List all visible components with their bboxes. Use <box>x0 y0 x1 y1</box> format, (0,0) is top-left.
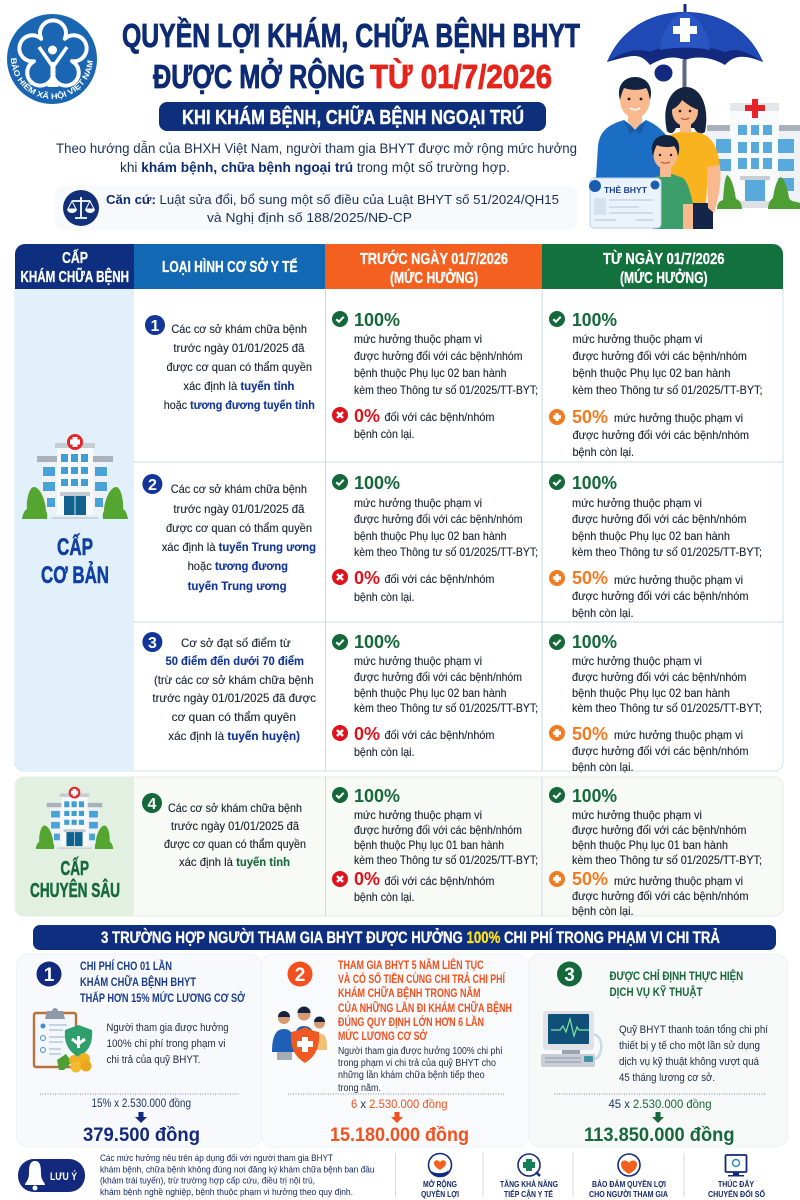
benefit: mở rộng quyền lợi: MỞ RỘNG <box>423 1178 457 1189</box>
row 4: facility type: 4 <box>148 796 157 813</box>
benefit: thúc đẩy chuyển đổi số: THÚC ĐẨY <box>718 1178 754 1189</box>
level: cấp chuyên sâu: CHUYÊN SÂU <box>30 878 120 902</box>
row 1: facility type: hoặc tương đương tuyến tỉnh <box>164 399 315 412</box>
table header: CẤP <box>62 248 88 267</box>
row 1: from 01/7/2026: mức hưởng thuộc phạm vi <box>572 333 702 346</box>
card 2 text <box>338 1045 503 1094</box>
row 3: before 01/7/2026: bệnh còn lại. <box>354 746 414 759</box>
row 3: facility type: trước ngày 01/01/2025 đã được <box>152 692 316 705</box>
table header: (MỨC HƯỞNG) <box>620 268 708 287</box>
row 1: from 01/7/2026: bệnh thuộc Phụ lục 02 ban hành <box>572 367 730 380</box>
title <box>122 17 580 95</box>
row 2: from 01/7/2026: mức hưởng thuộc phạm vi <box>572 497 702 510</box>
woman <box>665 87 721 229</box>
card 3 result: 113.850.000 đồng <box>584 1125 734 1146</box>
card 3 <box>528 954 788 1147</box>
row 2: facility type: tuyến Trung ương <box>188 580 287 593</box>
row 1: facility type: trước ngày 01/01/2025 đã <box>173 342 305 355</box>
logo: Bảo hiểm xã hội Việt Nam: BẢO HIỂM XÃ HỘI VIỆT NAM <box>10 58 93 100</box>
row 4: before 01/7/2026: 100% <box>354 786 400 806</box>
benefit: bảo đảm quyền lợi cho người tham gia: CHO NGƯỜI THAM GIA <box>589 1188 668 1199</box>
row 4: before 01/7/2026: 0% <box>354 869 380 889</box>
row 3: facility type: xác định là tuyến huyện) <box>168 730 300 743</box>
badge 3 <box>557 962 582 986</box>
card 2 heading: KHÁM CHỮA BỆNH TRONG NĂM <box>338 987 480 1000</box>
row 2: from 01/7/2026: được hưởng đối với các bệnh/nhóm <box>572 513 746 526</box>
note badge: lưu ý <box>18 1159 85 1192</box>
row 2: from 01/7/2026 <box>549 473 762 620</box>
card 2 heading: VÀ CÓ SỐ TIỀN CÙNG CHI TRẢ CHI PHÍ <box>338 972 506 986</box>
badge 2: 2 <box>295 965 305 986</box>
card 2 text: trong năm. <box>338 1083 381 1094</box>
row 3: from 01/7/2026: kèm theo Thông tư số 01/2025/TT-BYT; <box>572 702 762 715</box>
health insurance card <box>589 178 661 228</box>
health insurance card: THẺ BHYT <box>604 184 648 195</box>
row 1: from 01/7/2026: 50% <box>572 407 608 427</box>
card 1 text: chi trả của quỹ BHYT. <box>106 1054 200 1066</box>
benefit: thúc đẩy chuyển đổi số: CHUYỂN ĐỔI SỐ <box>708 1188 765 1199</box>
intro text: khi khám bệnh, chữa bệnh ngoại trú trong một số trường hợp. <box>120 160 510 175</box>
title: ĐƯỢC MỞ RỘNG <box>153 57 365 95</box>
row 4: from 01/7/2026 <box>549 786 762 918</box>
card 1 heading: CHI PHÍ CHO 01 LẦN <box>80 960 172 973</box>
row 2: facility type: xác định là tuyến Trung ương <box>162 541 316 554</box>
card 2 heading: CỦA NHỮNG LẦN ĐI KHÁM CHỮA BỆNH <box>338 1002 512 1015</box>
card 1 text: 100% chi phí trong phạm vi <box>106 1038 226 1050</box>
card 3 heading <box>610 970 743 999</box>
row 2: from 01/7/2026: bệnh còn lại. <box>572 607 634 620</box>
row 2: before 01/7/2026: bệnh thuộc Phụ lục 02 ban hành <box>354 530 506 543</box>
row 4: before 01/7/2026: kèm theo Thông tư số 01/2025/TT-BYT; <box>354 854 538 867</box>
logo: Bảo hiểm xã hội Việt Nam <box>7 14 97 104</box>
badge 2 <box>288 962 312 986</box>
row 4: before 01/7/2026: bệnh thuộc Phụ lục 01 ban hành <box>354 839 504 852</box>
table header <box>15 244 783 289</box>
table header: LOẠI HÌNH CƠ SỞ Y TẾ <box>162 257 298 276</box>
row 1: before 01/7/2026: 0% <box>354 406 380 426</box>
row 2: facility type: trước ngày 01/01/2025 đã <box>173 503 305 516</box>
banner: 3 cases: 3 TRƯỜNG HỢP NGƯỜI THAM GIA BHYT ĐƯỢC HƯỞNG 100% CHI PHÍ TRONG PHẠM VI CHI TRẢ <box>101 928 720 947</box>
row 3: facility type: Cơ sở đạt số điểm từ <box>181 637 291 650</box>
row 1: before 01/7/2026: đối với các bệnh/nhóm <box>384 411 494 424</box>
level: cấp chuyên sâu <box>30 787 120 902</box>
legal basis callout <box>55 185 577 231</box>
row 2: from 01/7/2026: mức hưởng thuộc phạm vi <box>614 574 743 587</box>
card 2 formula: 6 x 2.530.000 đồng <box>351 1097 448 1111</box>
row 3: from 01/7/2026: bệnh thuộc Phụ lục 02 ban hành <box>572 687 730 700</box>
row 2: facility type: 2 <box>148 477 157 494</box>
note text: khám bệnh, chữa bệnh không đúng nơi đăng ký khám chữa bệnh ban đầu <box>100 1164 374 1174</box>
row 4: from 01/7/2026: được hưởng đối với các bệnh/nhóm <box>572 890 748 903</box>
card 2 text: trong phạm vi chi trả của quỹ BHYT cho <box>338 1057 496 1069</box>
row 3: before 01/7/2026: bệnh thuộc Phụ lục 02 ban hành <box>354 687 506 700</box>
row 2: before 01/7/2026: mức hưởng thuộc phạm vi <box>354 497 482 510</box>
row 3: from 01/7/2026: 50% <box>572 724 608 744</box>
card 3 text <box>619 1024 768 1084</box>
arrow 2 <box>391 1112 403 1123</box>
title: QUYỀN LỢI KHÁM, CHỮA BỆNH BHYT <box>122 17 580 54</box>
row 4: facility type <box>142 793 306 869</box>
man <box>596 77 666 178</box>
legal basis text: và Nghị định số 188/2025/NĐ-CP <box>207 210 412 225</box>
row 3: facility type: (trừ các cơ sở khám chữa bệnh <box>154 674 314 687</box>
row 4: from 01/7/2026: mức hưởng thuộc phạm vi <box>572 809 702 822</box>
card 2 heading: ĐÚNG QUY ĐỊNH LỚN HƠN 6 LẦN <box>338 1016 484 1029</box>
row 1: before 01/7/2026: bệnh thuộc Phụ lục 02 ban hành <box>354 367 506 380</box>
badge 1: 1 <box>44 965 55 986</box>
card 2 heading: MỨC LƯƠNG CƠ SỞ <box>338 1030 427 1043</box>
row 4: before 01/7/2026: bệnh còn lại. <box>354 891 414 904</box>
badge 3: 3 <box>564 965 575 986</box>
row 1: facility type: được cơ quan có thẩm quyền <box>166 361 312 374</box>
note badge: lưu ý: LƯU Ý <box>50 1170 78 1183</box>
row 3: from 01/7/2026: 100% <box>572 632 617 652</box>
row 4: facility type: trước ngày 01/01/2025 đã <box>171 820 300 833</box>
card 1 result: 379.500 đồng <box>83 1125 200 1146</box>
benefit: tăng khả năng tiếp cận y tế: TIẾP CẬN Y TẾ <box>504 1188 553 1199</box>
card 1 heading: KHÁM CHỮA BỆNH BHYT <box>80 976 196 989</box>
row 1: facility type: xác định là tuyến tỉnh <box>183 380 294 393</box>
card 1 heading <box>80 960 245 1005</box>
row 2: before 01/7/2026 <box>332 473 538 604</box>
legal basis text <box>106 192 559 225</box>
subtitle pill <box>159 102 546 131</box>
level: cấp cơ bản: CẤP <box>57 533 93 561</box>
table header: KHÁM CHỮA BỆNH <box>20 266 129 286</box>
card 3 heading: ĐƯỢC CHỈ ĐỊNH THỰC HIỆN <box>610 970 743 983</box>
benefit: mở rộng quyền lợi: QUYỀN LỢI <box>421 1189 459 1199</box>
table header: TRƯỚC NGÀY 01/7/2026 <box>360 249 508 268</box>
row 2: before 01/7/2026: bệnh còn lại. <box>354 591 414 604</box>
row 1: facility type <box>145 315 315 412</box>
note text: khám bệnh nghề nghiệp, bệnh thuộc phạm vi hưởng theo quy định. <box>100 1186 353 1197</box>
row 3: facility type: cơ quan có thẩm quyên <box>172 711 296 724</box>
row 1: before 01/7/2026 <box>332 310 538 441</box>
card 3 text: 45 tháng lương cơ sở. <box>619 1072 715 1084</box>
icon: clipboard with shield <box>34 1008 92 1072</box>
icon: scales <box>63 190 99 226</box>
legal basis text: Căn cứ: Luật sửa đổi, bổ sung một số điều của Luật BHYT số 51/2024/QH15 <box>106 192 559 207</box>
row 3: from 01/7/2026: được hưởng đối với các bệnh/nhóm <box>572 671 746 684</box>
row 3: before 01/7/2026: 0% <box>354 724 380 744</box>
benefit: thúc đẩy chuyển đổi số <box>708 1155 765 1199</box>
intro text <box>56 141 577 175</box>
boy <box>652 135 693 229</box>
icon: family with shield <box>272 1007 327 1063</box>
note text: Các mức hưởng nêu trên áp dụng đối với người tham gia BHYT <box>100 1152 333 1163</box>
row 1: from 01/7/2026: mức hưởng thuộc phạm vi <box>614 412 743 425</box>
card 2 text: Người tham gia được hưởng 100% chi phí <box>338 1045 503 1057</box>
row 4: from 01/7/2026: 100% <box>572 786 617 806</box>
row 1: facility type: Các cơ sở khám chữa bệnh <box>171 323 307 336</box>
level: cấp cơ bản <box>22 434 128 589</box>
row 4: before 01/7/2026: được hưởng đối với các bệnh/nhóm <box>354 824 522 837</box>
arrow 3 <box>652 1112 664 1123</box>
row 4: from 01/7/2026: kèm theo Thông tư số 01/2025/TT-BYT; <box>572 854 762 867</box>
row 1: before 01/7/2026: 100% <box>354 310 400 330</box>
card 3 text: dịch vụ kỹ thuật không vượt quá <box>619 1056 760 1068</box>
title: TỪ 01/7/2026 <box>370 58 552 95</box>
note text: (khám trái tuyến), trừ trường hợp cấp cứu, điều trị nội trú, <box>100 1174 315 1186</box>
card 2 heading: THAM GIA BHYT 5 NĂM LIÊN TỤC <box>338 959 484 972</box>
row 2: before 01/7/2026: đối với các bệnh/nhóm <box>384 573 494 586</box>
row 1: from 01/7/2026: bệnh còn lại. <box>572 446 634 459</box>
row 2: before 01/7/2026: kèm theo Thông tư số 01/2025/TT-BYT; <box>354 546 538 559</box>
row 2: facility type: được cơ quan có thẩm quyền <box>166 522 312 535</box>
level: cấp cơ bản: CƠ BẢN <box>41 560 109 589</box>
row 3: before 01/7/2026 <box>332 632 538 759</box>
row 1: from 01/7/2026: được hưởng đối với các bệnh/nhóm <box>572 350 747 363</box>
row 4: facility type: Các cơ sở khám chữa bệnh <box>168 802 302 815</box>
row 2: from 01/7/2026: được hưởng đối với các bệnh/nhóm <box>572 590 748 603</box>
row 1: from 01/7/2026: được hưởng đối với các bệnh/nhóm <box>572 429 749 442</box>
hospital <box>707 99 800 209</box>
row 4: from 01/7/2026: bệnh còn lại. <box>572 905 634 918</box>
row 2: from 01/7/2026: 50% <box>572 568 608 588</box>
intro text: Theo hướng dẫn của BHXH Việt Nam, người tham gia BHYT được mở rộng mức hưởng <box>56 141 577 156</box>
card 1 text <box>106 1022 228 1066</box>
card 3 text: thiết bị y tế cho một lần sử dụng <box>619 1040 760 1052</box>
row 4: from 01/7/2026: bệnh thuộc Phụ lục 01 ban hành <box>572 839 728 852</box>
level: cấp chuyên sâu: CẤP <box>60 857 89 880</box>
umbrella <box>607 4 763 88</box>
row 2: facility type: hoặc tương đương <box>188 560 288 573</box>
row 4: before 01/7/2026 <box>332 786 538 904</box>
row 4: from 01/7/2026: 50% <box>572 869 608 889</box>
row 3: before 01/7/2026: mức hưởng thuộc phạm vi <box>354 655 482 668</box>
row 4: facility type: xác định là tuyến tỉnh <box>179 856 290 869</box>
card 2 result: 15.180.000 đồng <box>330 1125 469 1146</box>
illustration: family under umbrella with hospital <box>589 4 800 229</box>
row 2: facility type: Các cơ sở khám chữa bệnh <box>171 483 307 496</box>
row 3: from 01/7/2026 <box>549 632 762 774</box>
row 3: from 01/7/2026: mức hưởng thuộc phạm vi <box>614 729 743 742</box>
row 4: from 01/7/2026: được hưởng đối với các bệnh/nhóm <box>572 824 746 837</box>
row 1: from 01/7/2026 <box>549 310 762 459</box>
card 1 heading: THẤP HƠN 15% MỨC LƯƠNG CƠ SỞ <box>80 992 245 1005</box>
benefit: bảo đảm quyền lợi cho người tham gia <box>589 1154 668 1199</box>
row 2: before 01/7/2026: 0% <box>354 568 380 588</box>
row 1: facility type: 1 <box>151 318 160 335</box>
banner: 3 cases <box>33 925 776 950</box>
row 2: from 01/7/2026: 100% <box>572 473 617 493</box>
benefit: mở rộng quyền lợi <box>421 1154 459 1199</box>
benefit: tăng khả năng tiếp cận y tế <box>500 1154 558 1199</box>
table header: TỪ NGÀY 01/7/2026 <box>603 249 725 268</box>
row 3: from 01/7/2026: bệnh còn lại. <box>572 761 634 774</box>
row 3: before 01/7/2026: 100% <box>354 632 400 652</box>
row 2: before 01/7/2026: được hưởng đối với các bệnh/nhóm <box>354 513 522 526</box>
arrow 1 <box>135 1112 147 1123</box>
card 2 heading <box>338 959 512 1043</box>
row 1: from 01/7/2026: 100% <box>572 310 617 330</box>
row 1: from 01/7/2026: kèm theo Thông tư số 01/2025/TT-BYT; <box>572 384 762 397</box>
row 2: from 01/7/2026: bệnh thuộc Phụ lục 02 ban hành <box>572 530 730 543</box>
row 4: before 01/7/2026: đối với các bệnh/nhóm <box>384 875 494 888</box>
table panel: cấp cơ bản background <box>15 280 783 771</box>
row 2: facility type <box>142 474 316 593</box>
card 1 formula: 15% x 2.530.000 đồng <box>92 1096 191 1110</box>
card 1 <box>16 954 262 1147</box>
card 2 <box>262 954 528 1147</box>
row 3: before 01/7/2026: kèm theo Thông tư số 01/2025/TT-BYT; <box>354 702 538 715</box>
row 2: before 01/7/2026: 100% <box>354 473 400 493</box>
row 4: facility type: được cơ quan có thẩm quyền <box>164 838 306 851</box>
row 3: facility type: 3 <box>148 635 157 652</box>
row 4: before 01/7/2026: mức hưởng thuộc phạm vi <box>354 809 482 822</box>
row 1: before 01/7/2026: mức hưởng thuộc phạm vi <box>354 333 482 346</box>
row 1: before 01/7/2026: được hưởng đối với các bệnh/nhóm <box>354 350 522 363</box>
card 3 text: Quỹ BHYT thanh toán tổng chi phí <box>619 1024 768 1036</box>
card 2 text: những lần khám chữa bệnh tiếp theo <box>338 1069 485 1081</box>
subtitle pill: KHI KHÁM BỆNH, CHỮA BỆNH NGOẠI TRÚ <box>182 105 524 129</box>
badge 1 <box>36 962 62 986</box>
note text <box>100 1152 374 1197</box>
row 3: facility type: 50 điểm đến dưới 70 điểm <box>166 655 304 668</box>
table panel: cấp chuyên sâu background <box>15 777 783 916</box>
row 3: before 01/7/2026: được hưởng đối với các bệnh/nhóm <box>354 671 522 684</box>
row 1: before 01/7/2026: bệnh còn lại. <box>354 428 414 441</box>
row 3: from 01/7/2026: được hưởng đối với các bệnh/nhóm <box>572 745 748 758</box>
row 1: before 01/7/2026: kèm theo Thông tư số 01/2025/TT-BYT; <box>354 384 538 397</box>
card 1 text: Người tham gia được hưởng <box>106 1022 228 1034</box>
card 3 formula: 45 x 2.530.000 đồng <box>608 1097 712 1111</box>
row 3: facility type <box>142 632 316 743</box>
table header: (MỨC HƯỞNG) <box>390 268 478 287</box>
card 3 heading: DỊCH VỤ KỸ THUẬT <box>610 986 702 999</box>
row 2: from 01/7/2026: kèm theo Thông tư số 01/2025/TT-BYT; <box>572 546 762 559</box>
row 3: from 01/7/2026: mức hưởng thuộc phạm vi <box>572 655 702 668</box>
benefit: bảo đảm quyền lợi cho người tham gia: BẢO ĐẢM QUYỀN LỢI <box>592 1178 666 1189</box>
row 4: from 01/7/2026: mức hưởng thuộc phạm vi <box>614 875 743 888</box>
benefit: tăng khả năng tiếp cận y tế: TĂNG KHẢ NĂNG <box>500 1178 558 1189</box>
icon: medical monitor <box>541 1011 601 1067</box>
row 3: before 01/7/2026: đối với các bệnh/nhóm <box>384 729 494 742</box>
